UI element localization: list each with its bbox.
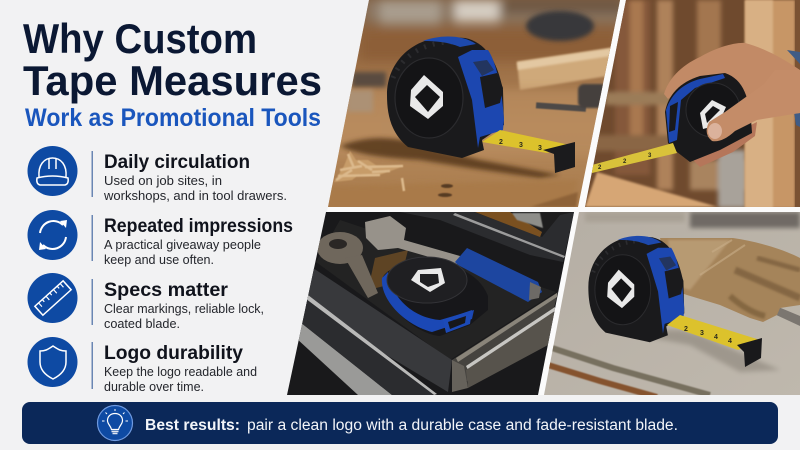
item: daily circulation bbox=[28, 146, 287, 203]
rebar background bbox=[776, 308, 800, 326]
icon: hard hat bbox=[28, 146, 78, 196]
description bbox=[104, 238, 261, 267]
tape 2 body bbox=[665, 73, 752, 162]
icon: ruler bbox=[28, 273, 78, 323]
description bbox=[104, 302, 264, 331]
description: coated blade. bbox=[104, 317, 180, 331]
subtitle: Work as Promotional Tools bbox=[25, 104, 321, 132]
description: keep and use often. bbox=[104, 253, 214, 267]
drawer back bbox=[400, 212, 574, 262]
thumb bbox=[706, 96, 800, 142]
photo: hand holding tape measure: 3 bbox=[648, 153, 652, 159]
photo: hand holding tape measure: 2 bbox=[598, 165, 602, 171]
heading: Daily circulation bbox=[104, 151, 250, 173]
description bbox=[103, 174, 287, 203]
photo: hand holding tape measure: 2 bbox=[623, 159, 627, 165]
title: Tape Measures bbox=[23, 57, 322, 104]
tape 1 body bbox=[387, 36, 504, 158]
tape 4 body bbox=[588, 236, 684, 342]
drawer interior bbox=[316, 220, 556, 360]
photo: hand holding tape measure bbox=[580, 0, 800, 210]
heading: Repeated impressions bbox=[104, 215, 293, 237]
description: A practical giveaway people bbox=[104, 238, 261, 252]
callout text: pair a clean logo with a durable case and fade-resistant blade. bbox=[247, 417, 678, 434]
wrench bbox=[317, 216, 460, 298]
photo: tape measure on concrete: 4 bbox=[714, 334, 718, 341]
tape 2 blade bbox=[592, 143, 677, 173]
tape 1 blade bbox=[482, 130, 570, 153]
item: logo durability bbox=[28, 337, 257, 394]
description: Keep the logo readable and bbox=[104, 365, 257, 379]
photo: tape measure on workbench bbox=[328, 0, 620, 207]
photo: tape measure on concrete: 4 bbox=[728, 338, 732, 345]
photo: tape measure on concrete: 2 bbox=[684, 326, 688, 333]
icon: light bulb bbox=[98, 406, 132, 440]
photo: tape measure on workbench: 3 bbox=[519, 142, 523, 149]
tape 3 body bbox=[382, 270, 488, 336]
tape 4 hook bbox=[737, 338, 762, 367]
description: durable over time. bbox=[104, 380, 204, 394]
icon: shield bbox=[28, 337, 78, 387]
lower fingers bbox=[693, 122, 757, 167]
callout: best results bbox=[22, 402, 778, 444]
heading: Logo durability bbox=[104, 342, 243, 364]
photo: tape measure in tool drawer bbox=[285, 210, 577, 397]
title: Why Custom bbox=[23, 15, 257, 62]
callout text: Best results: bbox=[145, 417, 240, 434]
description: Used on job sites, in bbox=[104, 174, 222, 188]
item: specs matter bbox=[28, 273, 264, 331]
photo: tape measure on concrete: 3 bbox=[700, 330, 704, 337]
photo gaps bbox=[287, 0, 800, 395]
drawer front bbox=[303, 268, 452, 392]
rebars bbox=[548, 348, 710, 397]
photo: tape measure on concrete bbox=[540, 210, 800, 397]
icon: circular arrows bbox=[28, 210, 78, 260]
tape 1 hook bbox=[543, 142, 575, 173]
sleeve bbox=[787, 50, 800, 127]
screwdriver bbox=[455, 248, 542, 302]
item: repeated impressions bbox=[28, 210, 293, 267]
description: workshops, and in tool drawers. bbox=[103, 189, 287, 203]
description: Clear markings, reliable lock, bbox=[104, 302, 264, 316]
glove bbox=[660, 238, 800, 322]
hand back bbox=[664, 43, 800, 117]
wood shavings bbox=[334, 151, 404, 191]
description bbox=[104, 365, 257, 394]
title bbox=[23, 15, 322, 104]
tape 4 blade bbox=[667, 315, 760, 350]
photo: tape measure on workbench: 3 bbox=[538, 145, 542, 152]
photo: tape measure on workbench: 2 bbox=[499, 139, 503, 146]
heading: Specs matter bbox=[104, 279, 228, 301]
shadow bbox=[656, 328, 777, 374]
